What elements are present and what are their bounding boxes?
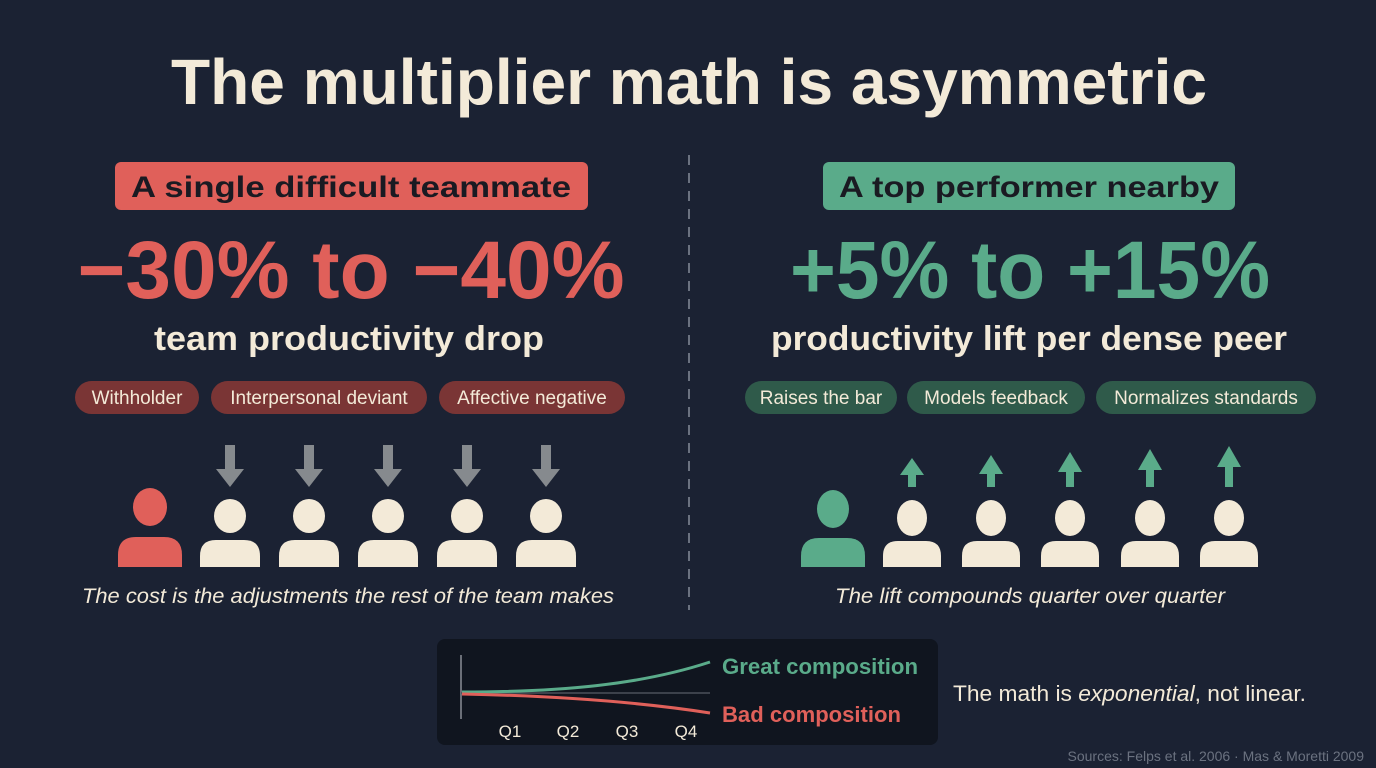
caption: left: The cost is the adjustments the rest of the team makes [82, 585, 615, 608]
pills: positive effects: Raises the bar [760, 388, 883, 409]
chart: composition over quarters [437, 639, 938, 745]
chart: composition over quarters: Q3 [616, 722, 638, 741]
sources: Sources: Felps et al. 2006 · Mas & Moretti 2009 [1068, 748, 1364, 764]
chart: composition over quarters: Great composition [722, 654, 918, 679]
panel: top performer [745, 162, 1316, 608]
pills: negative types: Affective negative [457, 388, 607, 409]
chart: composition over quarters: Q1 [499, 722, 521, 741]
heading: top performer [823, 162, 1235, 210]
panel: difficult teammate [75, 162, 625, 608]
icons: people with down arrows [118, 445, 576, 567]
heading: top performer: A top performer nearby [839, 171, 1219, 204]
title: The multiplier math is asymmetric [171, 46, 1207, 118]
text: exponential note: The math is exponential, not linear. [953, 681, 1306, 706]
chart: composition over quarters: Q2 [557, 722, 579, 741]
subtitle: productivity drop: team productivity drop [154, 320, 544, 358]
pills: negative types: Withholder [92, 388, 183, 409]
caption: right: The lift compounds quarter over quarter [835, 585, 1226, 608]
heading: difficult teammate [115, 162, 588, 210]
pills: positive effects: Normalizes standards [1114, 388, 1298, 409]
chart: composition over quarters: Q4 [675, 722, 697, 741]
big number: positive: +5% to +15% [790, 225, 1270, 316]
big number: negative: −30% to −40% [78, 225, 624, 316]
chart: composition over quarters: Bad composition [722, 702, 901, 727]
subtitle: productivity lift: productivity lift per dense peer [771, 320, 1287, 358]
pills: positive effects [745, 381, 1316, 414]
pills: positive effects: Models feedback [924, 388, 1068, 409]
pills: negative types: Interpersonal deviant [230, 388, 408, 409]
icons: people with up arrows [801, 446, 1258, 567]
pills: negative types [75, 381, 625, 414]
heading: difficult teammate: A single difficult teammate [131, 171, 571, 204]
